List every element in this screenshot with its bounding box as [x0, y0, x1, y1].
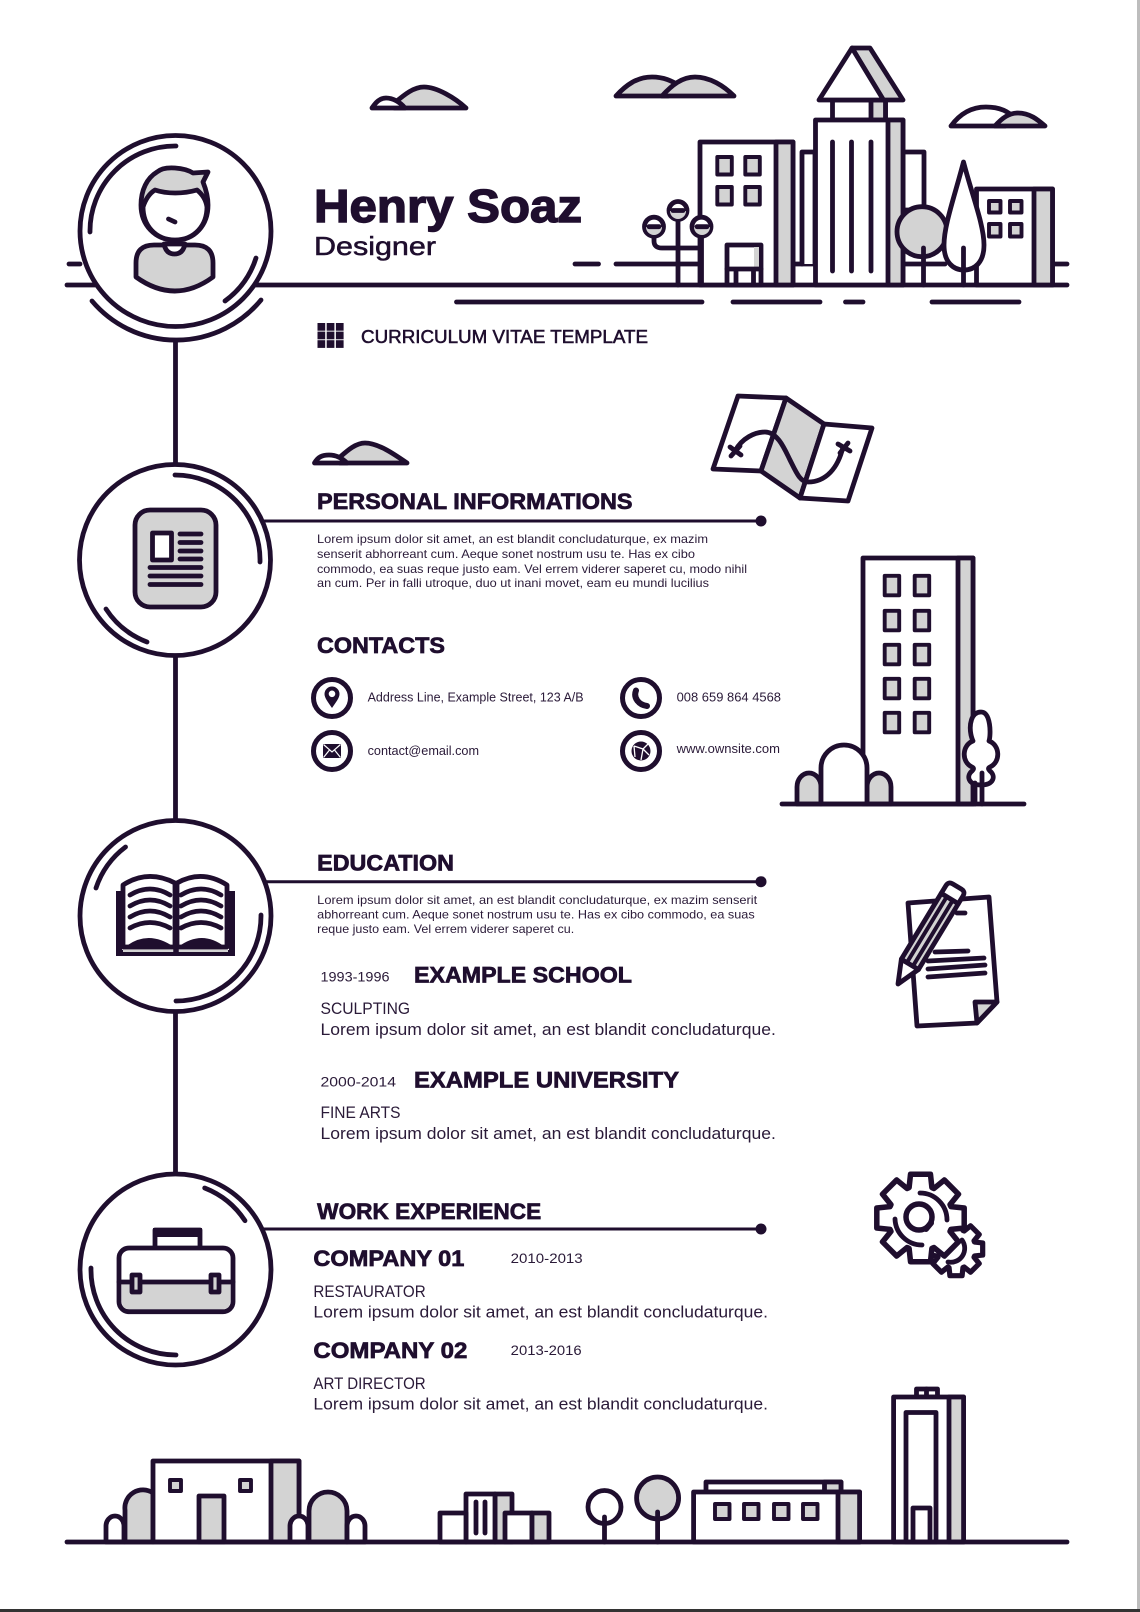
- label text: CURRICULUM VITAE TEMPLATE: [361, 326, 648, 347]
- body text: abhorreant cum. Aeque sonet nostrum usu te. Has ex cibo commodo, ea suas: [317, 908, 755, 922]
- contact: address: Address Line, Example Street, 123 A/B: [368, 691, 584, 705]
- timeline spine: [173, 341, 178, 1173]
- icon: briefcase: [119, 1228, 233, 1312]
- body text: reque justo eam. Vel errem viderer saperet cu.: [317, 922, 574, 936]
- subtitle: role: Designer: [314, 231, 436, 261]
- entry: company 02: ART DIRECTOR: [313, 1375, 426, 1393]
- contact: website: www.ownsite.com: [676, 742, 780, 756]
- entry: school: EXAMPLE SCHOOL: [414, 963, 632, 988]
- icon circle: briefcase: [80, 1174, 271, 1365]
- tree: outline: [588, 1490, 621, 1542]
- section rule: [266, 876, 766, 887]
- long building: [694, 1482, 860, 1542]
- header road lines: [67, 264, 1067, 302]
- entry: school: [320, 963, 776, 1039]
- name block: [314, 180, 582, 261]
- house with bushes: [106, 1461, 365, 1542]
- entry: company 02: COMPANY 02: [313, 1338, 467, 1363]
- tall tower: [894, 1389, 964, 1542]
- icon: grid: [318, 323, 344, 348]
- template label: [318, 323, 648, 348]
- entry: company 02: [313, 1338, 768, 1413]
- body text: an cum. Per in falli utroque, duo ut inani movet, eam eu mundi lucilius: [317, 576, 709, 590]
- tree: tall: [944, 162, 984, 285]
- entry: company 01: [313, 1246, 768, 1322]
- panel: work experience: [80, 1174, 768, 1413]
- contact: email: contact@email.com: [368, 744, 479, 758]
- panel: personal informations: [80, 464, 766, 656]
- entry: company 02: 2013-2016: [511, 1343, 582, 1358]
- icon: open book: [116, 876, 235, 956]
- body text: [317, 893, 758, 936]
- building: left block: [700, 142, 793, 285]
- entry: company 01: RESTAURATOR: [313, 1283, 426, 1301]
- entry: university: 2000-2014: [320, 1075, 397, 1090]
- contact: phone: 008 659 864 4568: [677, 691, 781, 705]
- building: wings: [802, 152, 924, 264]
- city skyline: header: [644, 48, 1052, 285]
- building: central tower: [816, 48, 903, 285]
- entry: company 01: Lorem ipsum dolor sit amet, an est blandit concludaturque.: [313, 1304, 768, 1322]
- contact: address: [314, 680, 584, 716]
- cloud: top centre: [616, 77, 734, 96]
- icon: person: [136, 168, 213, 291]
- entry: university: FINE ARTS: [320, 1104, 400, 1122]
- body text: Lorem ipsum dolor sit amet, an est blandit concludaturque, ex mazim senserit: [317, 893, 758, 907]
- entry: school: 1993-1996: [320, 970, 390, 985]
- cloud: personal section: [314, 443, 407, 463]
- body text: commodo, ea suas reque justo eam. Vel errem viderer saperet cu, modo nihil: [317, 562, 747, 576]
- small complex: [440, 1494, 549, 1542]
- icon circle: document: [80, 464, 270, 656]
- entry: university: [320, 1068, 776, 1143]
- heading: CONTACTS: [317, 633, 445, 658]
- icon: pencil and paper: [889, 881, 997, 1026]
- heading: PERSONAL INFORMATIONS: [317, 489, 632, 514]
- cloud: top left: [372, 87, 466, 108]
- icon: folded map: [713, 396, 872, 501]
- entry: university: EXAMPLE UNIVERSITY: [414, 1068, 679, 1093]
- entry: company 02: Lorem ipsum dolor sit amet, an est blandit concludaturque.: [313, 1395, 768, 1413]
- heading: EDUCATION: [317, 851, 454, 876]
- entry: university: Lorem ipsum dolor sit amet, an est blandit concludaturque.: [320, 1125, 776, 1143]
- body text: [317, 532, 747, 590]
- entry: company 01: 2010-2013: [511, 1251, 583, 1266]
- contact: phone: [622, 680, 781, 716]
- panel: education: [80, 820, 776, 1143]
- body text: senserit abhorreant cum. Aeque sonet nostrum usu te. Has ex cibo: [317, 547, 695, 561]
- section rule: [263, 1224, 766, 1234]
- icon circle: book: [80, 820, 271, 1012]
- illustration: apartment building: [782, 558, 1024, 804]
- street lamps: [644, 202, 711, 285]
- profile circle: [80, 136, 271, 340]
- tree: filled: [637, 1477, 679, 1542]
- icon: document: [135, 510, 216, 607]
- title: name: Henry Soaz: [314, 180, 582, 232]
- icon: gears: [877, 1174, 983, 1276]
- city skyline: footer: [67, 1389, 1067, 1542]
- body text: Lorem ipsum dolor sit amet, an est blandit concludaturque, ex mazim: [317, 532, 708, 546]
- entry: school: Lorem ipsum dolor sit amet, an est blandit concludaturque.: [320, 1021, 776, 1039]
- tree: round: [897, 207, 947, 285]
- ground line: [67, 1540, 1067, 1544]
- panel: contacts: [314, 633, 781, 770]
- cloud: top right: [951, 107, 1045, 126]
- contact: email: [314, 732, 479, 770]
- entry: company 01: COMPANY 01: [313, 1246, 464, 1271]
- heading: WORK EXPERIENCE: [317, 1199, 541, 1224]
- entry: school: SCULPTING: [320, 1000, 410, 1018]
- contact: website: [622, 732, 780, 770]
- building: right block: [976, 189, 1052, 285]
- section rule: [263, 516, 766, 526]
